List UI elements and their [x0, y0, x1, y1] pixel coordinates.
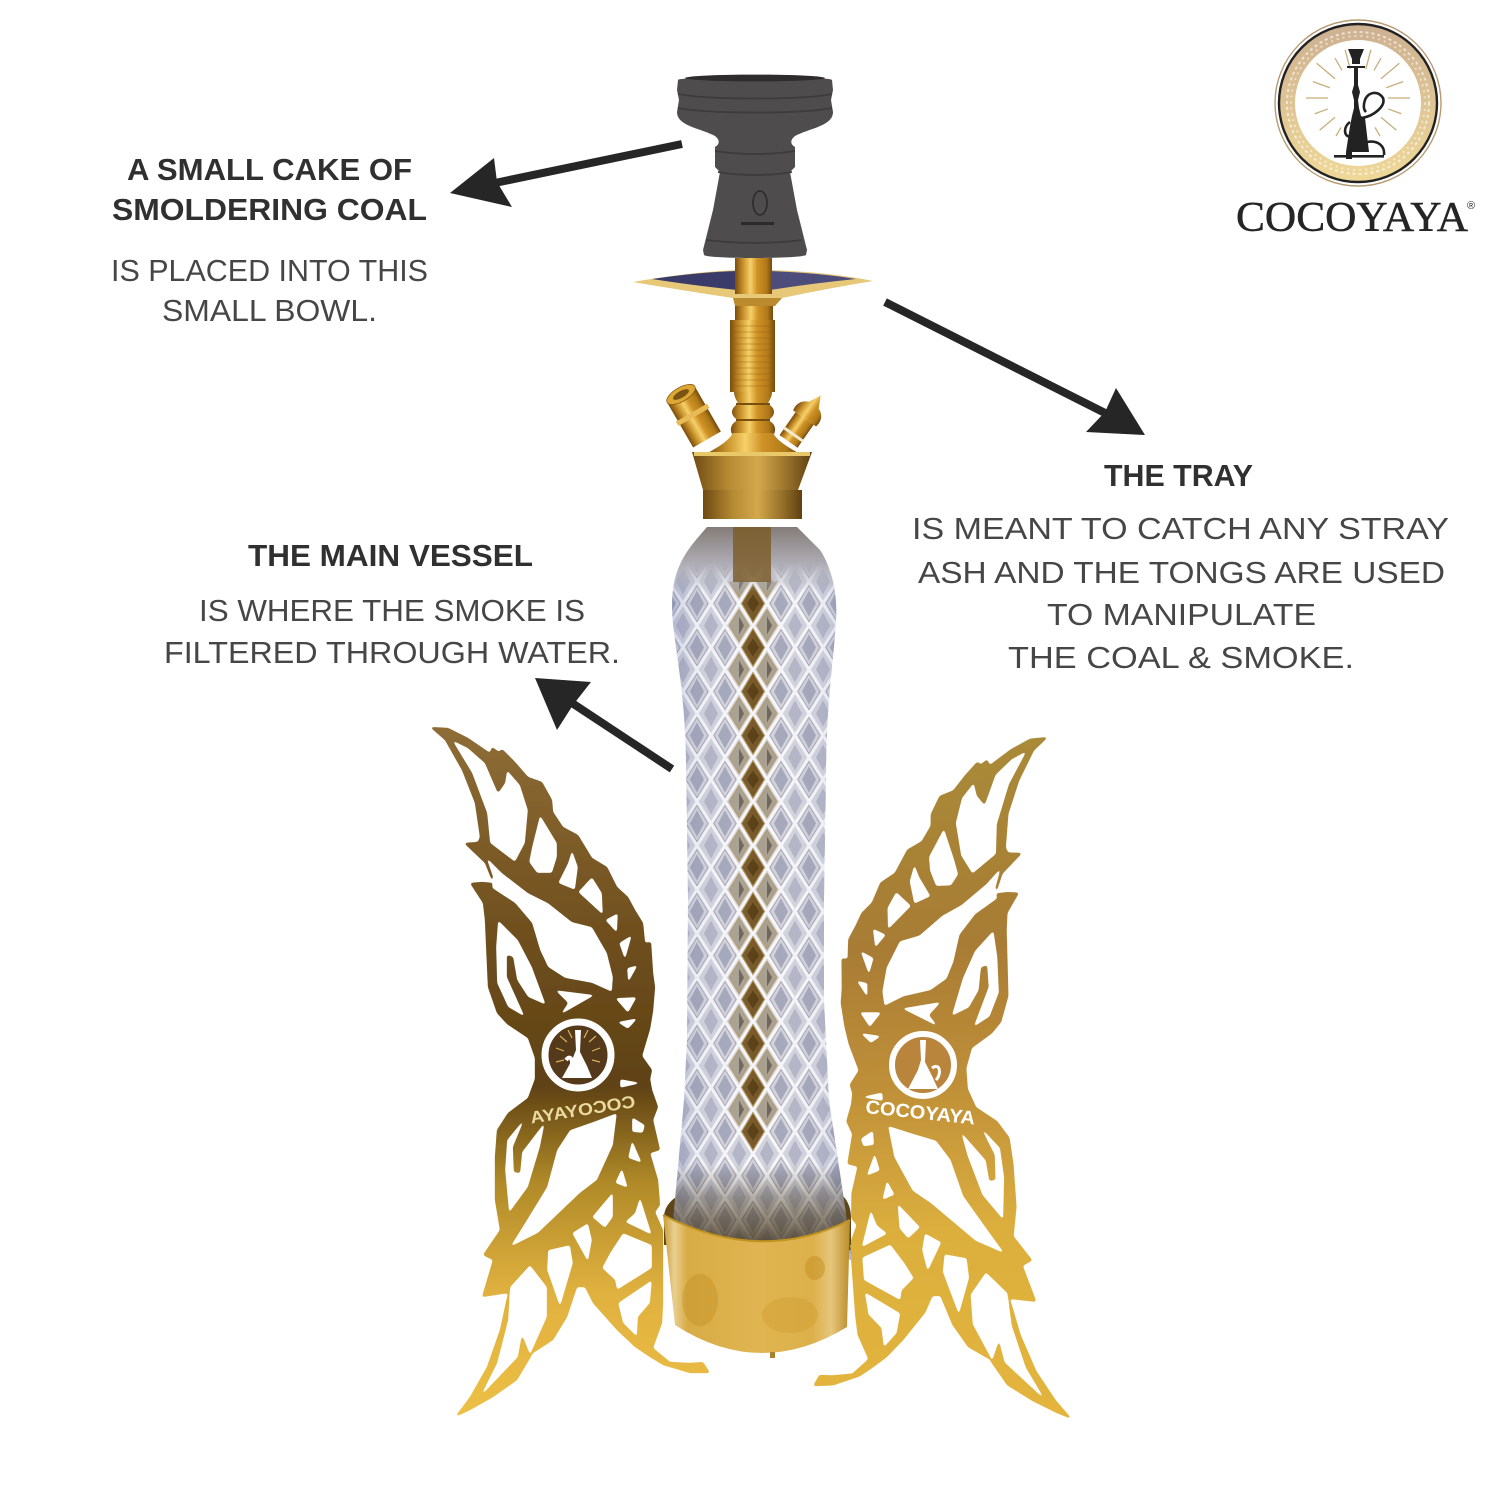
callout: small cake of smoldering coal	[111, 152, 428, 328]
wing cut-out shape	[767, 737, 1097, 1430]
heading: A SMALL CAKE OF	[127, 152, 412, 187]
description	[111, 253, 428, 328]
base ring	[663, 1215, 850, 1358]
main vessel: cut-glass bottle	[672, 527, 852, 1260]
base shading	[674, 1168, 851, 1250]
wing mirrored wordmark: COCOYAYA	[529, 1092, 637, 1128]
wing: left	[430, 727, 710, 1417]
description: ASH AND THE TONGS ARE USED	[918, 555, 1445, 590]
ring interior behind glass	[664, 1190, 851, 1245]
description: TO MANIPULATE	[1047, 597, 1316, 632]
stem flank diamonds behind glass	[728, 582, 778, 1126]
tray	[633, 270, 873, 306]
logo wordmark: COCOYAYA	[1236, 195, 1469, 241]
wing cut-out shape	[430, 727, 710, 1417]
hookah head: bowl, tray, stem and ports	[633, 75, 873, 519]
stem in neck	[733, 522, 771, 582]
heading: THE MAIN VESSEL	[248, 538, 533, 573]
logo: Cocoyaya brand mark	[1236, 20, 1475, 241]
arrow: to tray	[885, 302, 1145, 435]
left port	[662, 379, 723, 449]
description: IS WHERE THE SMOKE IS	[199, 593, 585, 628]
description: THE COAL & SMOKE.	[1008, 640, 1354, 675]
description: IS PLACED INTO THIS	[111, 253, 428, 288]
description	[164, 593, 620, 670]
gold pipe above tray	[735, 258, 772, 294]
arrow: to bowl	[450, 144, 682, 207]
knurled stem	[730, 300, 775, 392]
beaded collar	[731, 392, 775, 434]
heading	[112, 152, 427, 227]
right port	[777, 387, 833, 450]
neck shading	[675, 527, 834, 590]
logo emblem	[1275, 20, 1441, 186]
arrow: to vessel	[535, 678, 672, 769]
description: FILTERED THROUGH WATER.	[164, 635, 620, 670]
description: IS MEANT TO CATCH ANY STRAY	[912, 511, 1449, 546]
clay bowl	[677, 75, 833, 258]
dome	[706, 433, 800, 454]
callout: the main vessel	[164, 538, 620, 670]
lower band	[703, 490, 802, 519]
wing wordmark: COCOYAYA	[864, 1097, 976, 1130]
glass edge tint	[672, 566, 852, 1260]
wing emblem	[892, 1034, 954, 1096]
crown	[692, 452, 812, 490]
heading: THE TRAY	[1104, 458, 1253, 493]
description	[912, 511, 1449, 675]
stem centre diamonds behind glass	[740, 584, 766, 1152]
heading: SMOLDERING COAL	[112, 192, 427, 227]
description: SMALL BOWL.	[162, 293, 377, 328]
wing: right	[767, 737, 1097, 1430]
wing emblem	[545, 1022, 611, 1088]
callout: the tray	[912, 458, 1449, 675]
registered mark: ®	[1467, 200, 1475, 212]
